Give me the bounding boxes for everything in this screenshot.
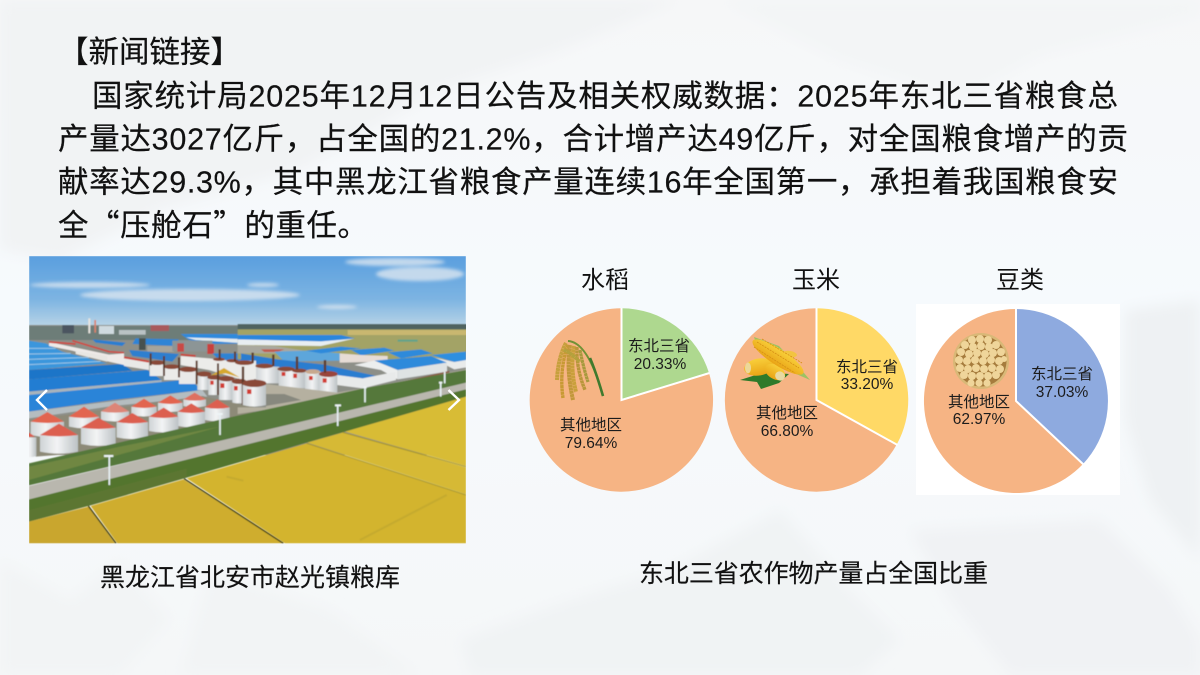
verge, road and fields xyxy=(29,370,466,543)
label: northeast share xyxy=(836,358,898,393)
mid blue roofs xyxy=(129,350,179,362)
label: northeast share xyxy=(628,337,690,373)
label: other regions: 其他地区 xyxy=(948,393,1010,411)
lamp posts xyxy=(109,372,445,485)
nearest tall silo xyxy=(243,385,266,407)
heading: corn: 玉米 xyxy=(792,267,840,294)
ground base xyxy=(29,325,466,455)
white bin rows xyxy=(49,342,124,365)
label: northeast share: 东北三省 xyxy=(1031,365,1093,383)
label: northeast share: 33.20% xyxy=(841,376,893,393)
label: northeast share: 东北三省 xyxy=(628,337,690,355)
label: northeast share: 37.03% xyxy=(1036,384,1088,401)
label: other regions xyxy=(560,416,622,452)
heading: soybean: 豆类 xyxy=(996,267,1044,294)
label: northeast share xyxy=(1031,365,1093,401)
far blue shed row xyxy=(238,335,355,342)
label: other regions xyxy=(948,393,1010,428)
carousel arrow: left xyxy=(37,390,47,410)
yard xyxy=(238,369,466,414)
yard under small silos xyxy=(29,396,254,457)
text block: news paragraph: 全“压舱石”的重任。 xyxy=(58,201,368,245)
sky xyxy=(29,256,466,328)
text block: news paragraph: 国家统计局2025年12月12日公告及相关权威数据：2025年东北三省粮食总 xyxy=(92,80,1118,114)
pie chart: soybean xyxy=(916,267,1120,495)
heading: rice: 水稻 xyxy=(581,267,629,294)
small red-roof silos back row xyxy=(183,399,206,407)
label: northeast share: 20.33% xyxy=(634,356,686,373)
caption: charts: 东北三省农作物产量占全国比重 xyxy=(639,560,988,588)
pie chart: rice xyxy=(530,267,713,492)
left blue roofs xyxy=(29,341,107,370)
tall silos xyxy=(239,361,256,379)
photo: Zhaoguang town grain depot xyxy=(24,256,468,543)
icon: corn cobs xyxy=(740,334,810,389)
icon: rice ear xyxy=(557,341,603,400)
right half of depot xyxy=(235,324,468,414)
pie chart: corn xyxy=(725,267,908,492)
caption: photo: 黑龙江省北安市赵光镇粮库 xyxy=(100,564,400,592)
left half of depot xyxy=(24,318,259,457)
label: other regions: 79.64% xyxy=(565,435,617,452)
label: other regions: 62.97% xyxy=(953,411,1005,428)
label: other regions: 其他地区 xyxy=(560,416,622,434)
icon: bowl of soybeans xyxy=(953,333,1009,389)
small red-roof silos front row xyxy=(205,407,230,421)
label: other regions xyxy=(756,404,818,440)
carousel arrow: right xyxy=(448,390,459,410)
label: other regions: 其他地区 xyxy=(756,404,818,422)
heading: news link: 【新闻链接】 xyxy=(58,36,241,70)
text block: news paragraph xyxy=(58,80,1128,245)
distant roofs xyxy=(274,351,341,362)
text block: news paragraph: 献率达29.3%，其中黑龙江省粮食产量连续16年全国第一，承担着我国粮食安 xyxy=(58,166,1118,200)
label: northeast share: 东北三省 xyxy=(836,358,898,376)
text block: news paragraph: 产量达3027亿斤，占全国的21.2%，合计增产达49亿斤，对全国粮食增产的贡 xyxy=(58,122,1128,156)
label: other regions: 66.80% xyxy=(761,423,813,440)
far blue sheds xyxy=(132,338,179,346)
tall silos xyxy=(150,363,164,376)
